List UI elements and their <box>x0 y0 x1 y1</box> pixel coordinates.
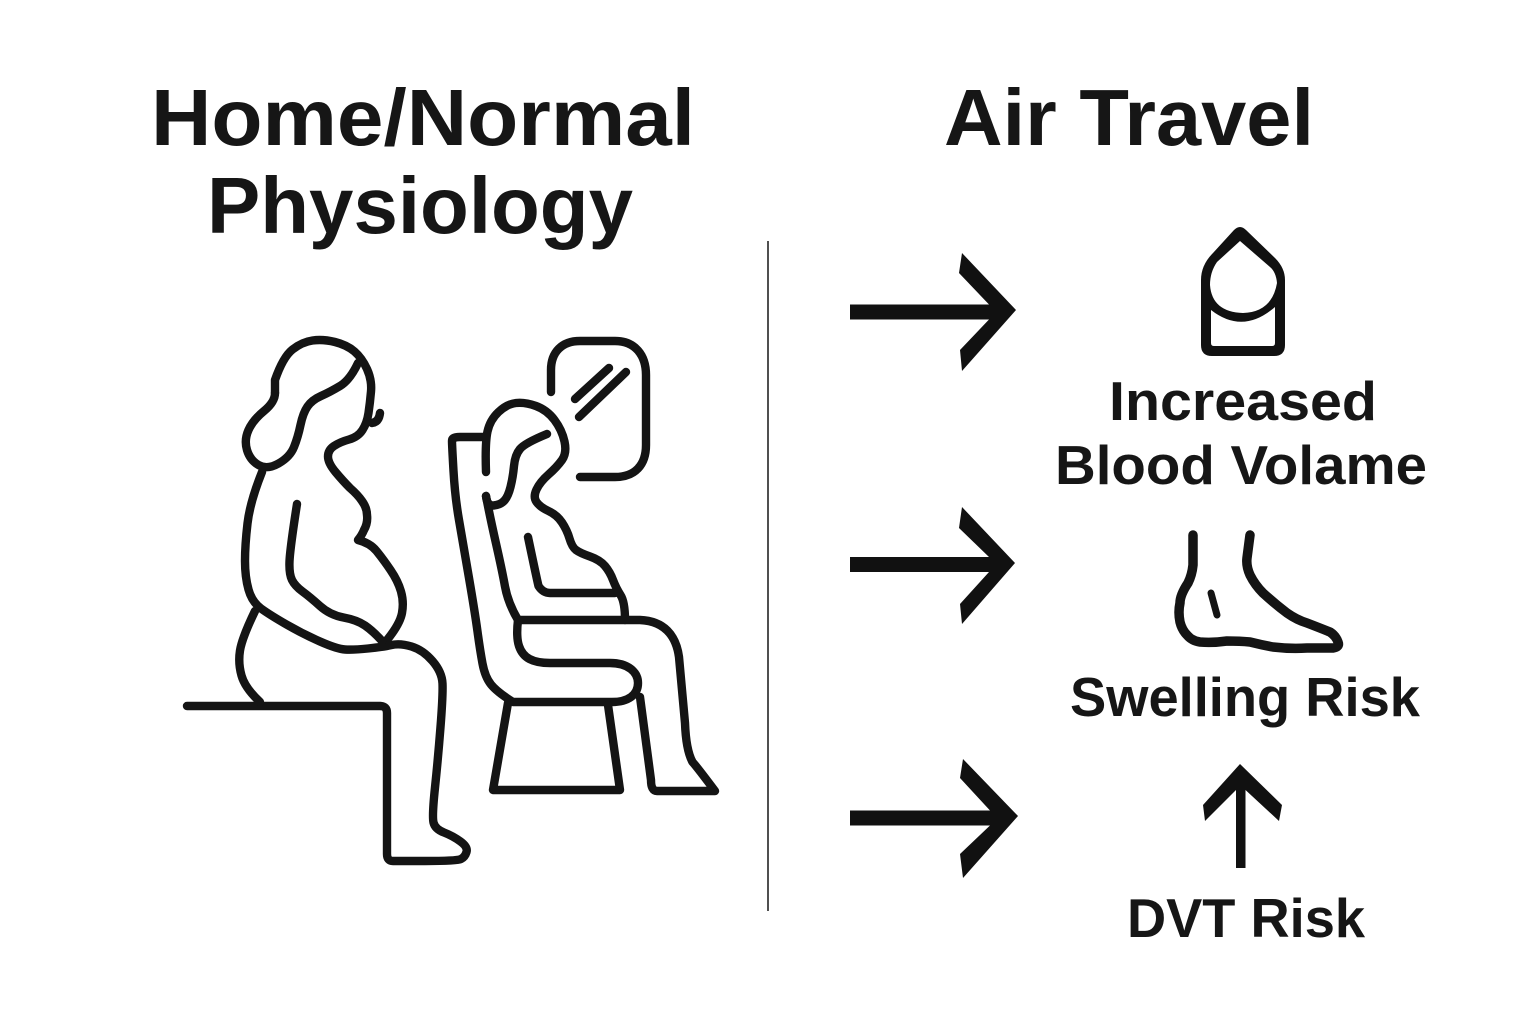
arrow up: DVT risk <box>1203 764 1282 868</box>
seat base <box>493 703 620 790</box>
seat <box>452 437 638 702</box>
label: Swelling Risk: Swelling Risk <box>1070 666 1420 728</box>
icon: swollen foot <box>1179 535 1338 648</box>
arrow 2 <box>850 507 1015 624</box>
icon: blood volume drop <box>1201 227 1285 356</box>
passenger hair <box>486 434 547 506</box>
label: DVT Risk: DVT Risk <box>1127 887 1365 949</box>
passenger arm <box>528 537 615 593</box>
passenger leg <box>518 620 715 791</box>
label: Increased Blood Volame: Blood Volame <box>1055 434 1427 496</box>
heading: Home/Normal Physiology <box>151 73 695 250</box>
heading: Home/Normal Physiology: Home/Normal <box>151 73 695 162</box>
passenger head and torso <box>486 403 625 620</box>
window reflection <box>575 368 626 417</box>
illustration: pregnant woman seated at home <box>187 340 467 861</box>
label: Increased Blood Volame: Increased <box>1109 370 1377 432</box>
arrow 1 <box>850 253 1016 371</box>
illustration: pregnant woman seated on plane <box>452 341 715 791</box>
center divider line <box>767 241 769 911</box>
heading: Home/Normal Physiology: Physiology <box>207 161 633 250</box>
passenger back <box>486 496 518 620</box>
heading: Air Travel: Air Travel <box>944 73 1314 162</box>
label: Increased Blood Volame <box>1055 370 1427 496</box>
arrow 3 <box>850 759 1018 878</box>
plane window <box>551 341 646 477</box>
